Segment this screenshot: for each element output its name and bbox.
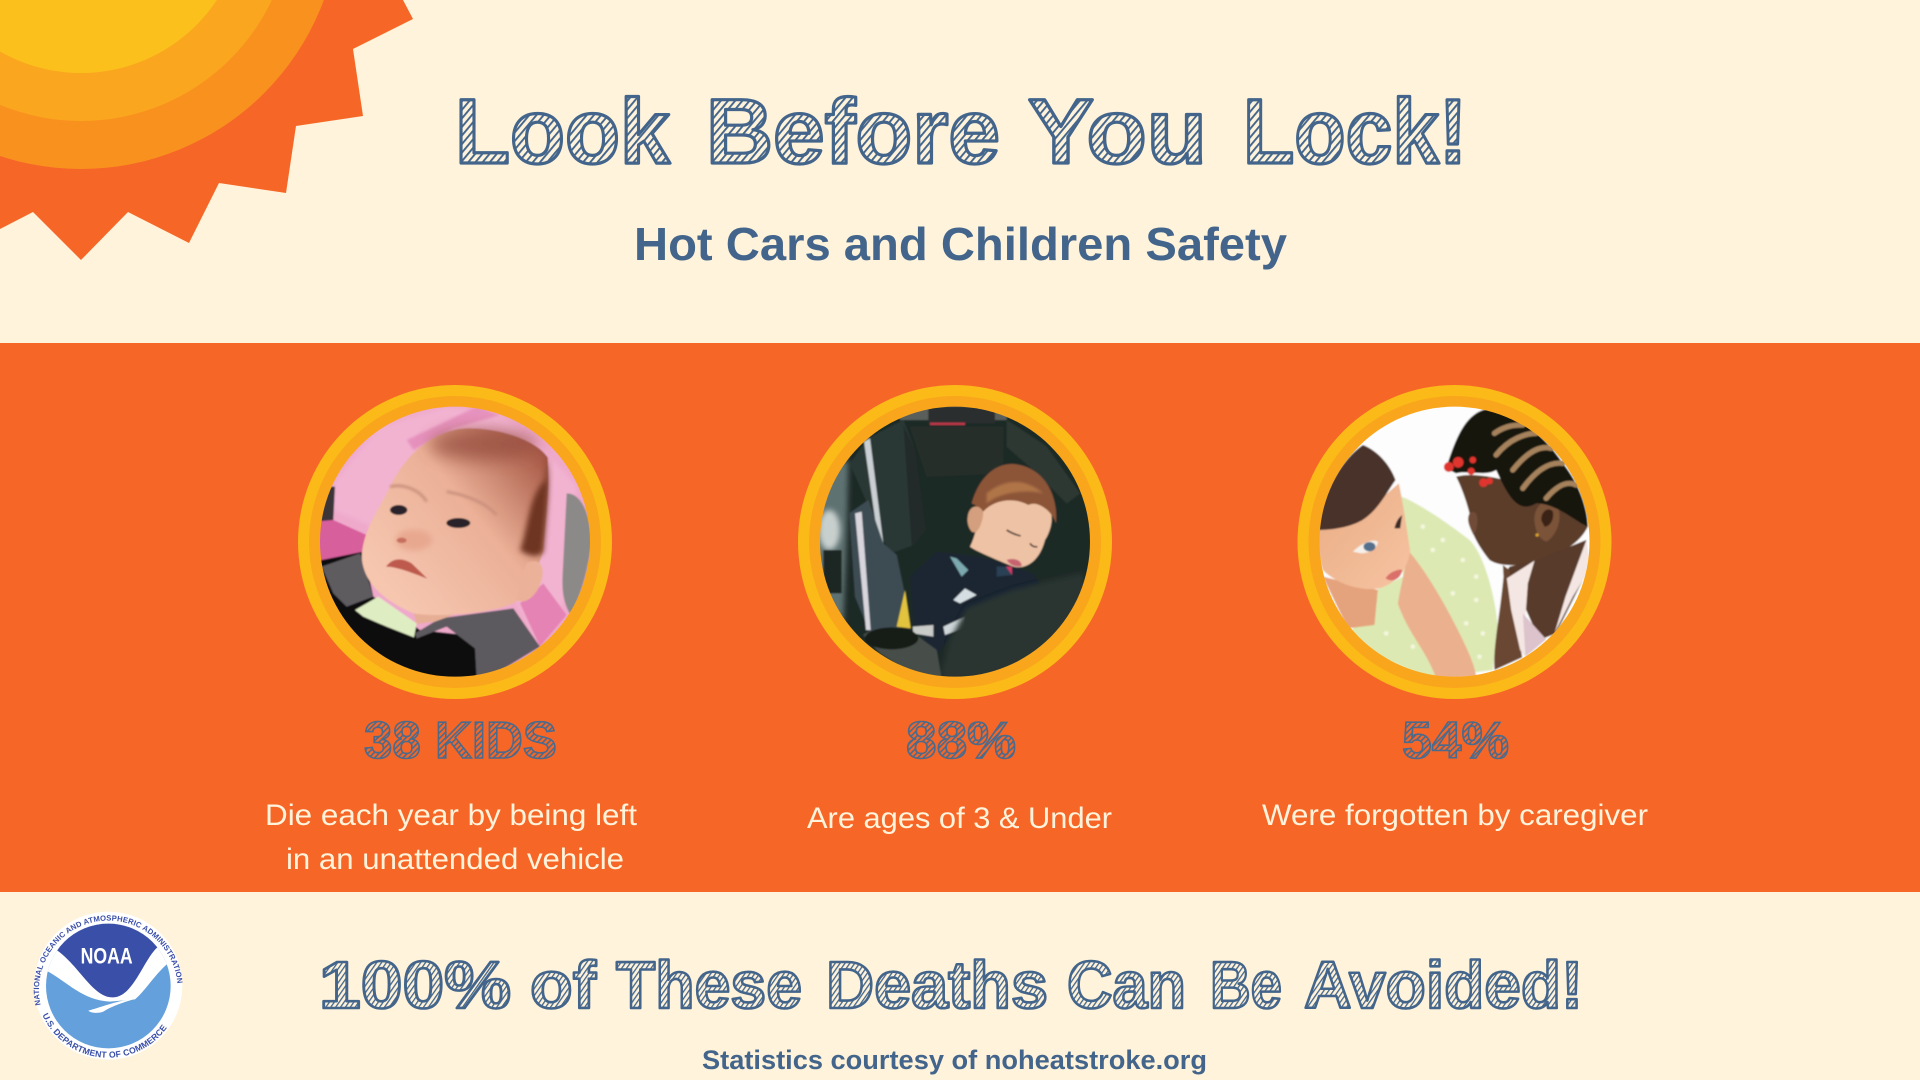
- closing headline: of: [530, 948, 597, 1023]
- stat value: 54%: 54%: [1402, 712, 1509, 770]
- stat description 1: in an unattended vehicle: [286, 843, 624, 876]
- stat description 1: [265, 799, 638, 876]
- photo: two toddlers: [1320, 406, 1590, 677]
- stat 3: 54%: [1262, 385, 1648, 832]
- icon: NOAA logo: U.S. DEPARTMENT OF COMMERCE: [43, 1012, 167, 1058]
- closing headline: 100%: [319, 948, 511, 1023]
- photo ring 3: [1298, 385, 1612, 699]
- closing headline: Deaths: [826, 948, 1048, 1023]
- title: Lock!: [1243, 81, 1467, 183]
- panel: statistics band: [0, 343, 1920, 892]
- title: Before: [706, 81, 1000, 183]
- photo ring 2: [798, 385, 1112, 699]
- title: [455, 81, 1467, 183]
- closing headline: Can: [1067, 948, 1186, 1023]
- closing headline: Avoided!: [1304, 948, 1583, 1023]
- stat description 2: Are ages of 3 & Under: [807, 802, 1112, 835]
- icon: NOAA logo: [34, 912, 183, 1060]
- stat 1: 38 kids: [265, 385, 638, 876]
- closing headline: [319, 948, 1583, 1023]
- photo: infant in car seat: [320, 406, 590, 677]
- icon: NOAA logo: NOAA: [81, 943, 133, 968]
- stat 2: 88%: [798, 385, 1112, 835]
- photo ring 1: [298, 385, 612, 699]
- source credit: Statistics courtesy of noheatstroke.org: [702, 1045, 1207, 1075]
- stat description 1: Die each year by being left: [265, 799, 638, 832]
- closing headline: These: [616, 948, 802, 1023]
- title: You: [1028, 81, 1207, 183]
- stat description 3: Were forgotten by caregiver: [1262, 799, 1648, 832]
- subtitle: Hot Cars and Children Safety: [634, 218, 1287, 270]
- photo: toddler asleep in car seat: [820, 406, 1090, 677]
- closing headline: Be: [1210, 948, 1282, 1023]
- icon: NOAA logo: NATIONAL OCEANIC AND ATMOSPHERIC ADMINISTRATION: [34, 915, 183, 1006]
- icon: sun: [0, 0, 413, 260]
- stat value: 88%: 88%: [906, 712, 1016, 770]
- title: Look: [455, 81, 671, 183]
- stat value: 38 kids: 38 KIDS: [364, 712, 557, 770]
